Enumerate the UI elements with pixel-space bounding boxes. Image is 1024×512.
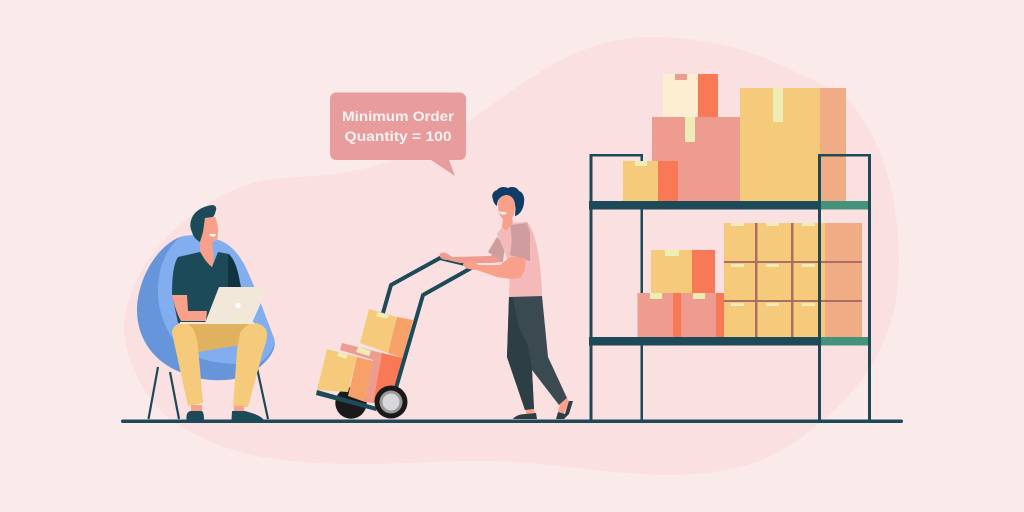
small yellow box: [623, 161, 678, 201]
smile: [209, 234, 216, 237]
front handle and frame: [396, 267, 473, 388]
boxes on lower shelf: [638, 223, 862, 337]
ground line: [121, 420, 903, 423]
chair: [137, 235, 275, 380]
front wheel: [374, 386, 408, 418]
feet: [186, 405, 264, 420]
hair: [190, 205, 216, 242]
background blob: [124, 37, 899, 475]
torso: [172, 252, 241, 323]
neck and face: [200, 217, 218, 267]
pink box right: [681, 293, 724, 337]
shirt: [497, 222, 542, 297]
pink box left: [638, 293, 681, 337]
sleeve shadow: [510, 223, 530, 261]
ankles: [526, 398, 570, 415]
laptop: [180, 287, 267, 324]
seated man with laptop: [137, 205, 275, 420]
trousers: [507, 296, 567, 410]
speech bubble: [330, 92, 466, 176]
chair legs: [148, 367, 268, 419]
front box: [317, 349, 373, 402]
large pink box: [652, 117, 740, 201]
large yellow box: [740, 88, 846, 201]
bubble text line 2: Quantity = 100: [344, 128, 452, 144]
standing man pushing cart: [440, 187, 573, 419]
left leg: [172, 323, 203, 406]
neck and face: [498, 195, 515, 231]
shelf front frame: [589, 154, 871, 421]
bubble text line 1: Minimum Order: [342, 108, 455, 124]
hand truck with boxes: [316, 258, 473, 419]
rear wheel: [335, 387, 367, 419]
upper box: [360, 309, 413, 358]
pants lap: [182, 323, 255, 352]
shirt shadow: [228, 254, 240, 287]
boxes on top shelf: [623, 74, 846, 201]
shoes: [513, 401, 573, 419]
shelf back posts: [590, 154, 643, 421]
near arm: [463, 257, 525, 279]
smile: [499, 212, 507, 215]
cream box: [663, 74, 718, 117]
arm: [172, 295, 207, 321]
yellow and orange box: [651, 250, 715, 293]
far arm: [440, 252, 503, 263]
hair: [492, 187, 524, 216]
stacked box grid: [724, 223, 862, 337]
back handle: [383, 258, 465, 313]
right leg: [233, 323, 267, 407]
far sleeve: [488, 237, 505, 262]
base plate: [316, 390, 377, 411]
trouser shadow: [507, 297, 534, 410]
lower pink and orange box: [340, 343, 403, 403]
